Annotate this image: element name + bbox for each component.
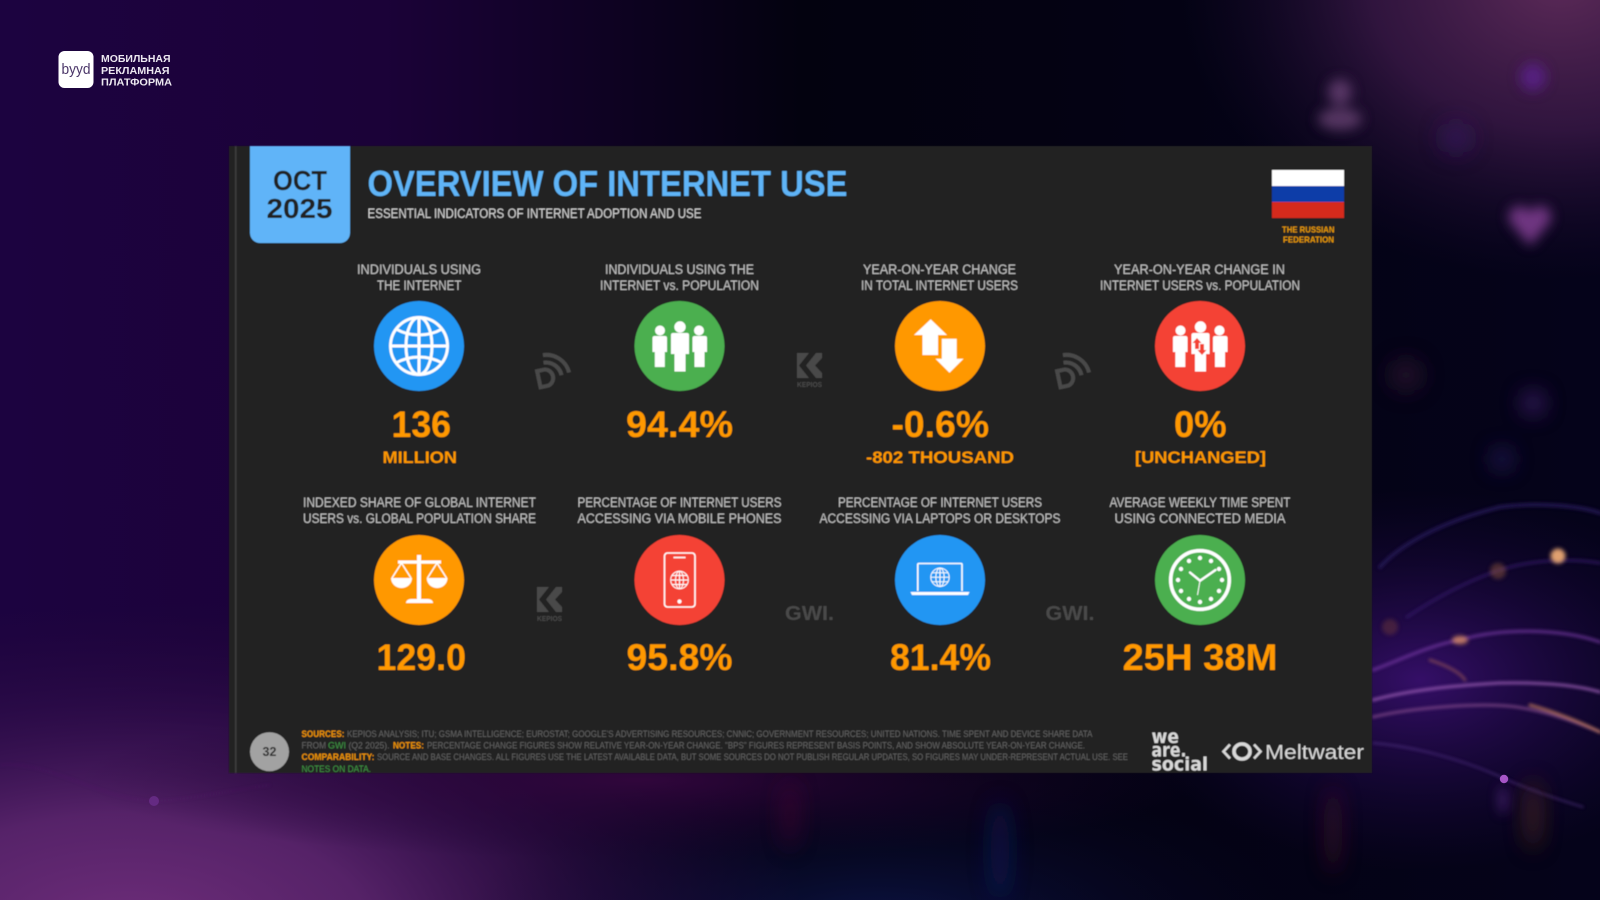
indicator: laptops or desktops: PERCENTAGE OF INTERNET USERS xyxy=(838,495,1042,510)
indicator: year-on-year change in users: -0.6% xyxy=(892,404,989,445)
indicator: individuals using the internet: 136 xyxy=(392,404,451,445)
indicator: mobile phones: PERCENTAGE OF INTERNET USERS xyxy=(578,495,782,510)
indicator: weekly time spent: 25H 38M xyxy=(1122,637,1278,678)
indicator: indexed share xyxy=(303,495,536,678)
panel: overview of internet use xyxy=(229,146,1372,776)
indicator: individuals vs population xyxy=(600,262,759,445)
date tab: OCT xyxy=(273,165,327,196)
indicator: year-on-year change in users: YEAR-ON-YEAR CHANGE xyxy=(863,262,1016,277)
icon: people xyxy=(634,301,724,391)
icon: mobile phone xyxy=(634,535,724,625)
flag: the russian federation xyxy=(1272,170,1344,244)
indicator: year-on-year change in users: -802 THOUSAND xyxy=(866,448,1014,467)
logo: byyd xyxy=(58,51,172,88)
footnotes: SOURCES: xyxy=(302,729,344,740)
footnotes: SOURCE AND BASE CHANGES. ALL FIGURES USE THE LATEST AVAILABLE DATA, BUT SOME SOURCES DO NOT PUBLISH REGULAR UPDATES, SO FIGURES MAY UNDER-REPRESENT ACTUAL USE. SEE xyxy=(377,752,1128,763)
footnotes: NOTES: xyxy=(393,741,424,752)
indicator: indexed share: 129.0 xyxy=(376,637,466,678)
source logo: gwi: GWI. xyxy=(1046,602,1094,625)
icon: balance scale xyxy=(374,535,464,625)
indicator: change vs population: [UNCHANGED] xyxy=(1135,448,1266,467)
indicator: individuals vs population: INDIVIDUALS USING THE xyxy=(605,262,754,277)
icon: clock xyxy=(1155,535,1245,625)
indicator: mobile phones xyxy=(578,495,782,678)
date tab xyxy=(250,146,350,243)
indicator: indexed share: INDEXED SHARE OF GLOBAL INTERNET xyxy=(303,495,536,510)
footnotes: COMPARABILITY: xyxy=(302,752,374,763)
flag: the russian federation: THE RUSSIAN xyxy=(1282,224,1334,234)
footnotes: (Q2 2025). xyxy=(348,741,390,752)
indicator: mobile phones: 95.8% xyxy=(626,637,732,678)
indicator: change vs population xyxy=(1100,262,1300,467)
source logo: kepios: KEPIOS xyxy=(797,382,822,389)
source logo: kepios xyxy=(797,353,822,389)
source logo: kepios: KEPIOS xyxy=(537,616,562,623)
logo: meltwater: Meltwater xyxy=(1265,742,1364,764)
logo: we are social: we xyxy=(1152,726,1179,748)
subtitle: ESSENTIAL INDICATORS OF INTERNET ADOPTION AND USE xyxy=(368,206,702,221)
footnotes: KEPIOS ANALYSIS; ITU; GSMA INTELLIGENCE; EUROSTAT; GOOGLE'S ADVERTISING RESOURCES; CNNIC; GOVERNMENT RESOURCES; UNITED NATIONS. TIME SPENT AND DEVICE SHARE DATA xyxy=(347,729,1093,740)
logo: we are social: social xyxy=(1152,754,1208,776)
title: OVERVIEW OF INTERNET USE xyxy=(368,163,848,204)
indicator: weekly time spent: USING CONNECTED MEDIA xyxy=(1114,511,1286,526)
indicator: change vs population: INTERNET USERS vs. POPULATION xyxy=(1100,278,1300,293)
indicator: individuals vs population: INTERNET vs. POPULATION xyxy=(600,278,759,293)
logo: we are social xyxy=(1152,726,1208,776)
icon: globe xyxy=(374,301,464,391)
logo: byyd: byyd xyxy=(62,61,90,78)
footnotes xyxy=(302,729,1128,775)
flag: the russian federation: FEDERATION xyxy=(1283,234,1334,244)
logo: we are social: are. xyxy=(1152,740,1186,762)
source logo: gwi: GWI. xyxy=(785,602,834,625)
page number: 32 xyxy=(263,745,276,759)
footnotes: NOTES ON DATA. xyxy=(302,764,371,775)
page number xyxy=(250,732,289,771)
footnotes: FROM xyxy=(302,741,326,752)
source logo: datareportal xyxy=(1054,351,1091,387)
footnotes: GWI xyxy=(328,741,346,752)
date tab: 2025 xyxy=(266,193,332,224)
icon: people with change arrows xyxy=(1155,301,1245,391)
indicator: year-on-year change in users xyxy=(861,262,1018,467)
indicator: individuals using the internet xyxy=(357,262,481,467)
indicator: change vs population: YEAR-ON-YEAR CHANGE IN xyxy=(1114,262,1285,277)
indicator: weekly time spent: AVERAGE WEEKLY TIME SPENT xyxy=(1110,495,1290,510)
indicator: individuals vs population: 94.4% xyxy=(626,404,733,445)
indicator: laptops or desktops: 81.4% xyxy=(890,637,991,678)
source logo: datareportal xyxy=(534,351,571,387)
indicator: change vs population: 0% xyxy=(1174,404,1226,445)
indicator: individuals using the internet: MILLION xyxy=(382,448,457,467)
logo: byyd: ПЛАТФОРМА xyxy=(101,76,172,88)
indicator: year-on-year change in users: IN TOTAL INTERNET USERS xyxy=(861,278,1018,293)
logo: byyd: РЕКЛАМНАЯ xyxy=(101,65,170,77)
icon: laptop xyxy=(895,535,985,625)
logo: meltwater xyxy=(1224,742,1364,764)
indicator: individuals using the internet: INDIVIDUALS USING xyxy=(357,262,481,277)
indicator: laptops or desktops xyxy=(820,495,1060,678)
indicator: laptops or desktops: ACCESSING VIA LAPTOPS OR DESKTOPS xyxy=(820,511,1060,526)
icon: up and down arrows xyxy=(895,301,985,391)
source logo: kepios xyxy=(537,587,562,623)
footnotes: PERCENTAGE CHANGE FIGURES SHOW RELATIVE YEAR-ON-YEAR CHANGE. "BPS" FIGURES REPRESENT BASIS POINTS, AND SHOW ABSOLUTE YEAR-ON-YEAR CHANGE. xyxy=(427,741,1085,752)
indicator: indexed share: USERS vs. GLOBAL POPULATION SHARE xyxy=(303,511,536,526)
indicator: mobile phones: ACCESSING VIA MOBILE PHONES xyxy=(578,511,782,526)
logo: byyd: МОБИЛЬНАЯ xyxy=(101,53,170,65)
indicator: individuals using the internet: THE INTERNET xyxy=(377,278,462,293)
indicator: weekly time spent xyxy=(1110,495,1290,678)
